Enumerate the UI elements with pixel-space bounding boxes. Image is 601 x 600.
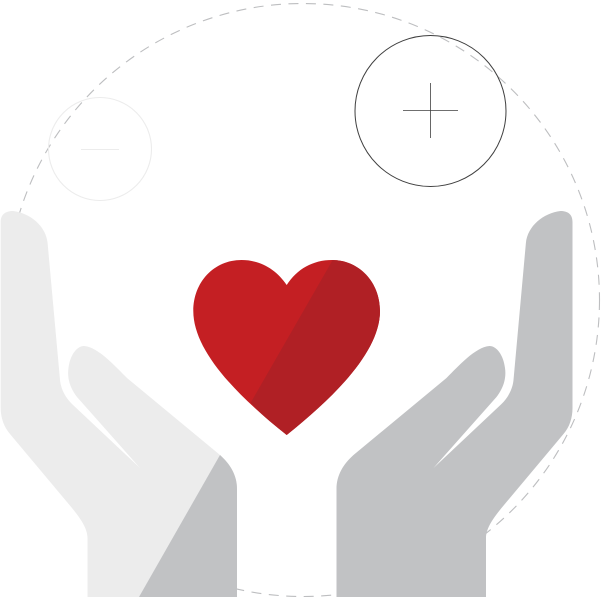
- heart dark side: [250, 260, 380, 435]
- left wrist shadow: [139, 455, 237, 597]
- heart light side: [190, 255, 385, 440]
- icon: plus circle: [355, 36, 506, 186]
- left hand: [1, 211, 237, 597]
- icon: minus circle: [48, 98, 152, 200]
- right hand: [336, 211, 572, 597]
- heart: [193, 260, 380, 435]
- left hand light shape: [1, 211, 237, 597]
